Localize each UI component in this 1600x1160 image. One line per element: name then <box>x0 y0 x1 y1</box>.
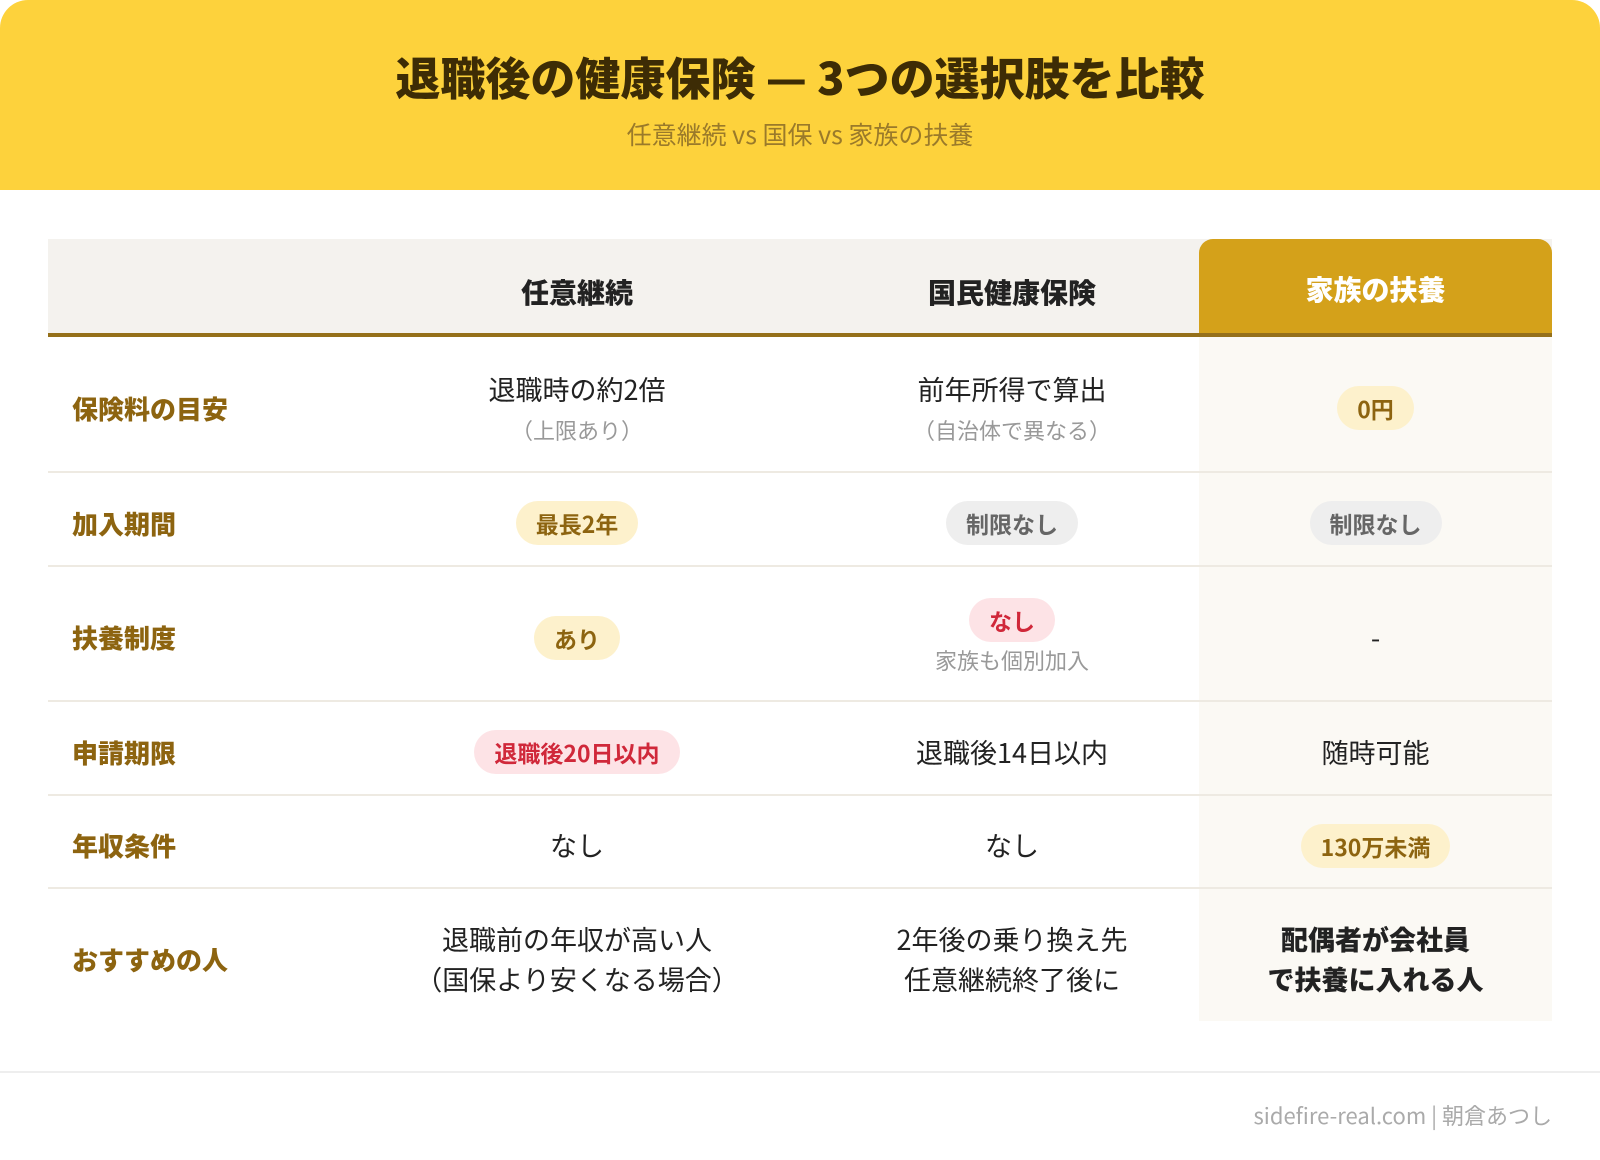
row: recommended: 任意継続終了後に <box>904 959 1120 998</box>
row: period: 制限なし <box>1330 506 1422 540</box>
row: deadline: 退職後20日以内 <box>494 735 660 769</box>
title: 退職後の健康保険 — 3つの選択肢を比較 <box>395 43 1205 108</box>
row: dependents: 家族も個別加入 <box>935 644 1089 676</box>
row: period <box>48 473 1552 567</box>
row: premium: 保険料の目安 <box>72 390 228 426</box>
row: dependents: あり <box>554 620 600 654</box>
row: dependents <box>48 567 1552 702</box>
row: income: 年収条件 <box>72 827 176 864</box>
row: recommended: 配偶者が会社員 <box>1281 918 1470 958</box>
comparison table <box>48 239 1552 1021</box>
row: premium: 退職時の約2倍 <box>488 369 666 408</box>
row: premium <box>48 337 1552 473</box>
row: deadline: 申請期限 <box>72 734 176 770</box>
row: recommended: 退職前の年収が高い人 <box>442 918 712 958</box>
row: income <box>48 796 1552 889</box>
row: dependents: 扶養制度 <box>72 619 176 656</box>
row: income: なし <box>550 825 604 864</box>
row: recommended: おすすめの人 <box>72 940 228 978</box>
row: income: 130万未満 <box>1321 828 1430 862</box>
subtitle: 任意継続 vs 国保 vs 家族の扶養 <box>627 116 973 152</box>
row: premium: （上限あり） <box>511 414 643 446</box>
row: recommended: 2年後の乗り換え先 <box>896 918 1128 958</box>
row: period: 最長2年 <box>536 506 618 540</box>
row: recommended <box>72 918 1484 998</box>
row: period: 制限なし <box>966 506 1058 540</box>
highlighted column header <box>1199 239 1552 333</box>
row: period: 加入期間 <box>72 504 176 542</box>
table header row: 国民健康保険 <box>928 272 1096 312</box>
row: dependents: - <box>1371 617 1380 656</box>
table header row <box>48 239 1552 337</box>
row: dependents: なし <box>989 603 1035 637</box>
header banner <box>0 0 1600 190</box>
credit: sidefire-real.com | 朝倉あつし <box>1253 1099 1552 1131</box>
row: premium: （自治体で異なる） <box>913 414 1111 446</box>
highlighted column header: 家族の扶養 <box>1305 269 1446 309</box>
row: premium: 前年所得で算出 <box>918 369 1106 408</box>
row: premium: 0円 <box>1357 391 1394 425</box>
row: income: なし <box>985 825 1039 864</box>
row: deadline: 随時可能 <box>1322 732 1430 771</box>
row: deadline: 退職後14日以内 <box>916 732 1108 771</box>
row: recommended: で扶養に入れる人 <box>1268 959 1484 998</box>
table header row: 任意継続 <box>521 272 633 312</box>
row: deadline <box>48 702 1552 796</box>
row: recommended: （国保より安くなる場合） <box>415 959 739 998</box>
